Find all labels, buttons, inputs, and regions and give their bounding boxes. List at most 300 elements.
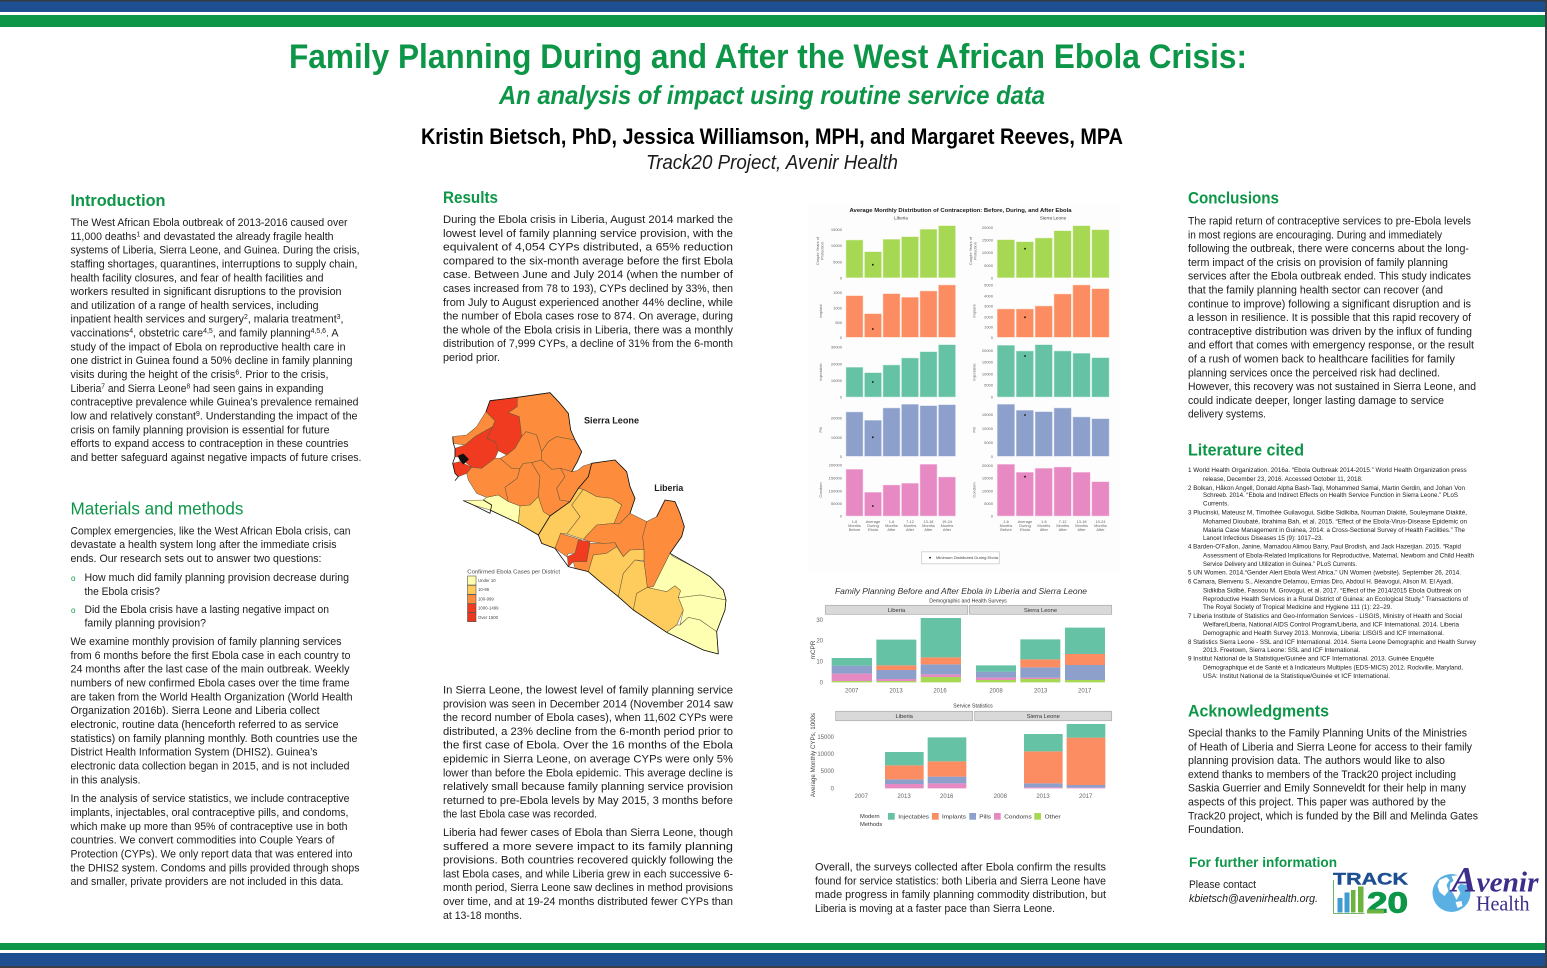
text: introduction: crisis on family planning provision is essential for future [70,424,330,436]
y axis titles: Pill [818,427,823,433]
y axis titles: Injectable [818,363,823,381]
text: materials and methods: 24 months after the last case of the main outbreak. Weekly [70,664,350,676]
column labels: Sierra Leone [1040,216,1067,220]
x axis labels: Ebola [868,527,879,532]
references: Welfare/Liberia, National AIDS Control Program/Liberia, and ICF International. 2014. Liberia [1203,622,1459,629]
text: results second block: returned to pre-Ebola levels by May 2015, 3 months before [443,795,733,807]
axis: CYPs: 2017 [1079,794,1093,800]
y axis titles: Implant [818,304,823,318]
y axis values: 15000 [982,476,994,481]
y axis values: 0 [840,514,843,519]
x axis labels: 7-12 [1059,519,1067,524]
axis: mCPR: 2016 [933,688,947,694]
districts: Liberia [538,460,726,654]
text: materials and methods: the DHIS2 system. Condoms and pills provided through shops [70,862,360,874]
chart title: Family Planning Before and After Ebola in Liberia and Sierra Leone [835,586,1087,596]
text: introduction: efforts to expand access to contraception in these countries [70,438,349,450]
y axis values: 0 [991,395,994,400]
affiliation: Track20 Project, Avenir Health [646,152,898,174]
text: introduction: Liberia [70,383,103,395]
axis: CYPs: 2013 [897,794,911,800]
text: results third block: provisions. Both countries recovered quickly following the [443,855,733,867]
text: results first block: the number of Ebola cases rose to 874. On average, during [443,311,733,323]
map: confirmed Ebola cases by district [453,393,726,654]
text: results third block: Liberia had fewer cases of Ebola than Sierra Leone, though [443,827,733,839]
text: acknowledgments: Track20 project, which is funded by the Bill and Melinda Gates [1188,810,1479,822]
references: 6 Camara, Bienvenu S., Alexandre Delamou, Ermias Diro, Abdoul H. Béavogui, Alison M. El Ayadi, [1188,579,1453,586]
axis: CYPs: 2016 [940,794,954,800]
text: introduction: . Understanding the impact of the [200,410,358,422]
legend: modern methods: Methods [860,822,882,828]
text: results second block: relatively small because family planning service provision [443,781,733,793]
text: conclusions: However, this recovery was not sustained in Sierra Leone, and [1188,381,1476,393]
text: introduction: . Prior to the crisis, [239,369,328,381]
facet strips: service statistics: Sierra Leone [1027,714,1060,720]
text: materials and methods: and smaller, private providers are not included in this data. [70,876,344,888]
text: introduction: systems of Liberia, Sierra Leone, and Guinea. During the crisis, [70,245,360,257]
text: introduction: 4,5,6 [311,328,326,335]
heading: conclusions: Conclusions [1188,188,1279,208]
axis: mCPR: 2007 [845,688,859,694]
text: results third block: last Ebola cases, and while Liberia grew in each successive 6- [443,868,733,880]
y axis values: 15000 [982,360,994,365]
bars: injectable [846,345,1109,397]
axis: mCPR [810,618,1092,694]
x axis labels: 1-6 [889,519,894,524]
references: The Royal Society of Tropical Medicine and Hygiene 111 (1): 22–29. [1203,604,1392,611]
x axis labels: After [924,527,933,532]
references: 1 World Health Organization. 2016a. “Ebola Outbreak 2014-2015.” World Health Organization press [1188,467,1467,474]
text: results first block: from July to August experienced another 44% decline, while [443,297,733,309]
axis: CYPs: Average Monthly CYPs, 1000s [810,713,817,797]
axis: CYPs: 5000 [821,769,835,775]
text: results third block [443,827,734,922]
stacked bars: CYPs from service statistics [885,724,1105,788]
references: 2 Bolkan, Håkon Angell, Donald Alpha Bash-Taqi, Mohammed Samai, Martin Gerdin, and Johan Von [1188,484,1465,492]
x axis labels: Months [922,523,935,528]
x axis labels: Months [1056,523,1069,528]
text: introduction: 8 [186,383,190,390]
text: conclusions: term impact of the crisis on provision of family planning [1188,257,1448,269]
map legend: 10-99 [478,587,490,592]
x axis labels: After [1040,527,1049,532]
facet strips: service statistics: Liberia [895,714,914,720]
x axis labels: 1-6 [1003,519,1009,524]
references: 9 Institut National de la Statistique/Guinée and ICF International. 2013. Guinée Enquête [1188,656,1434,663]
x axis labels: Months [1094,523,1107,528]
x axis labels: After [1077,527,1086,532]
axis: mCPR: 2013 [1034,688,1048,694]
axis: CYPs: 0 [831,786,835,792]
text: materials and methods: numbers of new confirmed Ebola cases over the time frame [70,678,350,690]
references: Lancet Infectious Diseases 15 (9): 1017–23. [1203,535,1323,542]
axis: CYPs: 2008 [994,794,1008,800]
legend: modern methods: Condoms [1004,814,1032,820]
x axis labels: Months [848,523,861,528]
y axis values: 10000 [831,243,843,248]
y axis values: 20000 [831,416,843,421]
text: conclusions: following the outbreak, there were concerns about the long- [1188,243,1469,255]
x axis labels: Before [1000,527,1012,532]
map legend: Under 10 [478,578,496,583]
text: acknowledgments: Special thanks to the Family Planning Units of the Ministries [1188,728,1468,740]
y axis values: 5000 [984,501,994,506]
legend: modern methods [860,813,1061,828]
x axis labels: During [1019,523,1031,528]
text: introduction: and better safeguard against negative impacts of future crises. [70,452,362,464]
y axis values: 1500 [833,290,843,295]
logo: Avenir Health: Avenir [1449,860,1540,900]
axis: mCPR: 2017 [1078,688,1092,694]
x axis labels: 13-18 [924,519,933,524]
text: conclusions [1188,216,1476,421]
x axis labels: 19-24 [942,519,953,524]
y axis values: 10000 [831,378,843,383]
y axis values: 15000 [831,227,843,232]
text: materials and methods: ends. Our research sets out to answer two questions: [70,553,322,565]
text: introduction: visits during the height of the crisis [70,369,236,381]
text: results second block: In Sierra Leone, the lowest level of family planning service [443,684,733,696]
x axis labels: After [943,527,952,532]
x axis labels: After [1059,527,1068,532]
x axis labels: Average [866,519,880,524]
text: materials and methods: o [71,606,76,615]
x axis labels: 1-6 [1041,519,1047,524]
x axis labels: Ebola [1020,527,1031,532]
y axis values: 5000 [833,259,843,264]
references: 5 UN Women. 2014.“Gender Alert Ebola West Africa.” UN Women (website). September 26, 2014. [1188,570,1461,576]
text: materials and methods: electronic data collection began in 2015, and is not included [70,761,350,773]
text: materials and methods: the Ebola crisis? [84,586,160,598]
y axis values: 15000 [982,238,994,243]
bars: condom [846,464,1109,516]
text: acknowledgments: of Heath of Liberia and Sierra Leone for access to their family [1188,741,1473,753]
y axis values: 0 [991,275,994,280]
references: 3 Plucinski, Mateusz M, Timothée Guilavogui, Sidibe Sidikiba, Nouman Diakité, Souleymane Diakité, [1188,510,1467,516]
y axis values: 500 [835,320,843,325]
map label: Liberia: Liberia [654,483,683,493]
text: results first block: During the Ebola crisis in Liberia, August 2014 marked the [443,214,733,226]
y axis values: 10000 [982,426,994,431]
text: introduction: workers resulted in significant disruptions to the provision [70,286,341,298]
top banner [0,0,1547,27]
map legend [467,570,561,622]
text: results first block: cases increased from 78 to 193), CYPs declined by 33%, then [443,283,733,295]
x axis labels: 13-18 [1077,519,1087,524]
text: conclusions: planning services once the perceived risk had declined. [1188,367,1440,379]
text: introduction: , and family planning [213,328,311,340]
y axis titles: Condom [818,482,823,498]
y axis values: 5000 [984,440,994,445]
logo: Avenir Health [1432,860,1540,916]
y axis values: 20000 [982,463,994,468]
text: results second block: the first case of Ebola. Over the 16 months of the Ebola [443,740,733,752]
text: acknowledgments [1188,728,1479,836]
text: introduction: The West African Ebola outbreak of 2013-2016 caused over [70,217,348,229]
y axis values: 100000 [829,488,843,493]
text: conclusions: and effort that comes with emergency response, or the result [1188,340,1474,352]
heading: introduction: Introduction [70,191,166,210]
references: release, December 23, 2016. Accessed October 11, 2018. [1203,476,1363,483]
axis: mCPR: 2013 [889,688,903,694]
text: introduction: contraceptive prevalence while Guinea’s prevalence remained [70,397,358,409]
y axis titles: Condom [972,482,976,498]
x axis labels: Average [1018,519,1032,524]
y axis values: 20000 [982,348,994,353]
x axis labels: Months [941,523,953,528]
axis: mCPR: 10 [816,659,824,665]
y axis values: 10000 [982,250,994,255]
text: results third block: over time, and at 19-24 months distributed fewer CYPs than [443,896,733,908]
facet strips: surveys [825,605,1112,614]
text: introduction: and devastated the already fragile health [140,231,334,243]
text: results second block: the record number of Ebola cases), when 11,602 CYPs were [443,712,733,724]
y axis values: 0 [840,454,843,459]
facet strips: service statistics [836,711,1112,721]
column labels: Liberia [894,216,908,220]
text: materials and methods: in this analysis. [70,774,140,786]
y axis titles: Pill [972,427,976,433]
y axis titles: Protection [972,242,978,260]
x axis labels: After [1096,527,1105,532]
survey subtitle: Demographic and Health Surveys [929,598,1007,604]
x axis labels: 19-24 [1096,519,1106,524]
bars: couple years of protection [846,226,1109,278]
y axis values: 0 [991,514,994,519]
text: introduction: inpatient health services and surgery [70,314,246,326]
heading: results: Results [443,188,498,207]
text: introduction: 1 [136,231,140,238]
authors: Kristin Bietsch, PhD, Jessica Williamson, MPH, and Margaret Reeves, MPA [421,124,1123,149]
text: materials and methods: Organization 2016b). Sierra Leone and Liberia collect [70,705,320,717]
references: 8 Statistics Sierra Leone - SSL and ICF International. 2014. Sierra Leone Demographic and Health Survey [1188,639,1477,646]
text: materials and methods: which make up more than 95% of contraceptive use in both [70,821,348,833]
x axis labels: During [867,523,879,528]
facet strips: surveys: Liberia [888,608,906,614]
references: USA: Institut National de la Statistique/Guinée et ICF International. [1203,673,1390,680]
references: Demographic and Health Survey 2013. Monrovia, Liberia: LISGIS and ICF International. [1203,630,1444,637]
y axis values: 15000 [982,412,994,417]
y axis values: 5000 [984,283,994,288]
references: Malaria Case Management in Guinea, 2014: a Cross-Sectional Survey of Health Facilities.” The [1203,527,1465,534]
text: introduction: and utilization of a range of health services, including [70,300,318,312]
text: results first block: equivalent of 4,054 CYPs distributed, a 65% reduction [443,242,733,254]
x axis labels: Months [1075,523,1088,528]
text: results second block: provision was seen in December 2014 (November 2014 saw [443,698,733,710]
map legend: Over 1500 [478,615,499,620]
x axis labels: After [906,527,915,532]
text: introduction: low and relatively constant [70,410,197,422]
legend: modern methods: Implants [942,814,966,820]
text: conclusions: contraceptive distribution was driven by the influx of funding [1188,326,1472,338]
text: introduction: 2 [244,314,248,321]
text: conclusions: The rapid return of contraceptive services to pre-Ebola levels [1188,216,1472,228]
subtitle: An analysis of impact using routine service data [498,80,1045,110]
y axis values: 150000 [829,475,843,480]
axis: CYPs: 2013 [1036,794,1050,800]
axis: CYPs [810,713,1093,800]
text: results second block: epidemic in Sierra Leone, on average CYPs were only 5% [443,754,733,766]
text: acknowledgments: extend thanks to members of the Track20 project including [1188,769,1456,781]
axis: CYPs: 10000 [817,752,835,758]
text: acknowledgments: aspects of this project. This paper was authored by the [1188,796,1446,808]
text: results first block: lowest level of family planning service provision, with the [443,228,733,240]
logo: Track20: TRACK [1333,870,1408,888]
chart title: Average Monthly Distribution of Contraception: Before, During, and After Ebola [850,208,1073,214]
text: results third block: suffered a more severe impact to its family planning [443,841,733,853]
heading: materials and methods: Materials and methods [70,498,244,518]
text: introduction: 4 [129,328,133,335]
y axis values: 50000 [831,501,843,506]
y axis values: 0 [840,395,843,400]
text: acknowledgments: Foundation. [1188,824,1244,836]
text: contact: kbietsch@avenirhealth.org. [1189,893,1318,905]
y axis values: 3000 [984,304,994,309]
text: introduction: 7 [101,383,105,390]
axis: mCPR: 30 [816,618,824,624]
y axis values: 5000 [984,263,994,268]
text: materials and methods: electronic, routine data (henceforth referred to as service [70,719,338,731]
map legend: 1000-1499 [478,606,499,611]
text: introduction: 9 [196,411,200,418]
y axis values: 4000 [984,293,994,298]
text: results second block [443,684,734,821]
references: 4 Barden-O’Fallon, Janine, Mamadou Alimou Barry, Paul Brodish, and Jack Hazerjian. 2015. “Rapid [1188,544,1461,551]
text: conclusions: services after the Ebola outbreak ended. This study indicates [1188,271,1472,283]
column labels [894,216,1067,220]
heading: literature cited: Literature cited [1188,440,1304,460]
text: materials and methods: are taken from the World Health Organization (World Health [70,691,352,703]
text: conclusions: continue to improve) following a significant disruption and is [1188,298,1472,310]
references: Mohamed Dioubaté, Ibrahima Bah, et al. 2015. “Effect of the Ebola-Virus-Disease Epidemic on [1203,518,1467,526]
references: Assessment of Ebola-Related Implications for Reproductive, Maternal, Newborn and Child Health [1203,553,1474,560]
bars: implant [846,285,1109,337]
text: conclusions: in most regions are encouraging. During and immediately [1188,229,1443,241]
y axis values: 10000 [831,435,843,440]
y axis values: 0 [840,335,843,340]
text: acknowledgments: Saskia Guerrier and Emily Sonneveldt for their help in many [1188,783,1467,795]
map label: Sierra Leone: Sierra Leone [584,416,639,426]
text: introduction [70,217,361,464]
text: conclusions: a lesson in resilience. It is possible that this rapid recovery of [1188,312,1472,324]
service statistics subtitle: Service Statistics [953,704,993,710]
y axis titles: Protection [820,242,824,260]
text: materials and methods: We examine monthly provision of family planning services [70,636,342,648]
map legend: 100-999 [478,596,494,601]
references: Reproductive Health Services in a Rural District of Guinea: an Ecological Study.” Transactions of [1203,596,1468,603]
y axis values: 0 [991,335,994,340]
text: introduction: 11,000 deaths [70,231,138,243]
x axis labels: 1-6 [852,519,857,524]
text: introduction: vaccinations [70,328,130,340]
x axis labels: Months [885,523,898,528]
y axis values: 20000 [831,361,843,366]
text: materials and methods: Complex emergencies, like the West African Ebola crisis, can [70,526,350,538]
text: materials and methods: How much did family planning provision decrease during [84,572,349,584]
y axis titles: Implant [972,304,976,318]
text: contact [1189,879,1318,905]
text: introduction: , obstetric care [133,328,203,340]
x axis labels: Months [1037,523,1050,528]
stacked bars: mCPR from surveys [832,618,1105,682]
y axis values: 0 [991,454,994,459]
text: results first block: case. Between June and July 2014 (when the number of [443,269,734,281]
text: results first block: distribution of 7,999 CYPs, a decline of 31% from the 6-month [443,338,733,350]
heading: further information: For further information [1189,854,1337,870]
text: results first block: period prior. [443,352,500,364]
chart: average monthly distribution of contraception [808,203,1120,573]
heading: acknowledgments: Acknowledgments [1188,702,1329,720]
text: introduction: 4,5 [203,328,213,335]
x axis labels: Months [1000,523,1012,528]
country borders [453,393,726,654]
text: overall survey finding: Liberia is moving at a faster pace than Sierra Leone. [815,903,1055,915]
text: overall survey finding: made progress in family planning commodity distribution, but [815,889,1106,901]
text: introduction: , malaria treatment [248,314,337,326]
text: materials and methods: In the analysis of service statistics, we include contraceptive [70,793,350,805]
y axis values [829,225,994,519]
text: results third block: month period, Sierra Leone saw declines in method provisions [443,882,734,894]
logo: Avenir Health: Health [1476,892,1530,916]
y axis titles: Injectable [972,363,976,381]
y axis values: 1000 [984,325,994,330]
y axis titles [815,236,978,498]
text: materials and methods: devastate a health system long after the immediate crisis [70,539,337,551]
y axis values: 1000 [833,305,843,310]
text: results third block: at 13-18 months. [443,910,522,922]
text: materials and methods: implants, injectables, oral contraceptive pills, and condoms, [70,807,348,819]
x axis labels: After [887,527,896,532]
chart: family planning before and after Ebola [810,586,1112,828]
text: results first block: the whole of the Ebola crisis in Liberia, there was a monthly [443,324,734,336]
text: results first block [443,214,734,364]
text: contact: Please contact [1189,879,1256,891]
text: results second block: lower than before the Ebola epidemic. This average decline is [443,767,734,779]
x axis labels: 7-12 [906,519,914,524]
facet strips: surveys: Sierra Leone [1024,608,1057,614]
text: materials and methods: countries. We convert commodities into Couple Years of [70,835,335,847]
y axis values: 30000 [831,345,843,350]
text: results first block: compared to the six-month average before the first Ebola [443,255,733,267]
axis: CYPs: 15000 [817,735,835,741]
bars: pill [846,404,1109,456]
x axis labels [848,519,1107,532]
text: materials and methods: Protection (CYPs). We only report data that was entered into [70,848,352,860]
y axis values: 0 [840,275,843,280]
references: Schreeb. 2014. “Ebola and Indirect Effects on Health Service Function in Sierra Leone.” PLoS [1203,492,1458,499]
references: 7 Liberia Institute of Statistics and Geo-Information Services - LISGIS, Ministry of Health and Social [1188,613,1462,620]
chart legend: Minimum Distributed During Ebola [936,555,999,560]
y axis values: 200000 [829,462,843,467]
text: introduction: staffing shortages, quarantines, interruptions to supply chain, [70,258,358,270]
text: conclusions: that the family planning health sector can recover (and [1188,284,1443,296]
text: materials and methods: statistics) on family planning monthly. Both countries use the [70,733,358,745]
text: materials and methods: family planning provision? [84,618,206,630]
text: results second block: distributed, a 23% decline from the 6-month period prior to [443,726,733,738]
districts: Sierra Leone [453,393,592,535]
text: overall survey finding [815,862,1107,915]
text: conclusions: of a rush of women back to healthcare facilities for family [1188,354,1456,366]
chart legend [922,552,999,564]
legend: modern methods: Injectables [898,814,929,820]
title: Family Planning During and After the West African Ebola Crisis: [289,38,1247,76]
x axis labels: Months [904,523,916,528]
y axis values: 5000 [984,383,994,388]
references: Sidikiba Sidibé, Fassou M. Grovogui, et al. 2017. “Effect of the 2014/2015 Ebola Outbreak on [1203,588,1461,595]
text: overall survey finding: Overall, the surveys collected after Ebola confirm the results [815,862,1107,874]
axis: mCPR: mCPR [810,640,817,659]
text: acknowledgments: planning provision data. The authors would like to also [1188,755,1445,767]
